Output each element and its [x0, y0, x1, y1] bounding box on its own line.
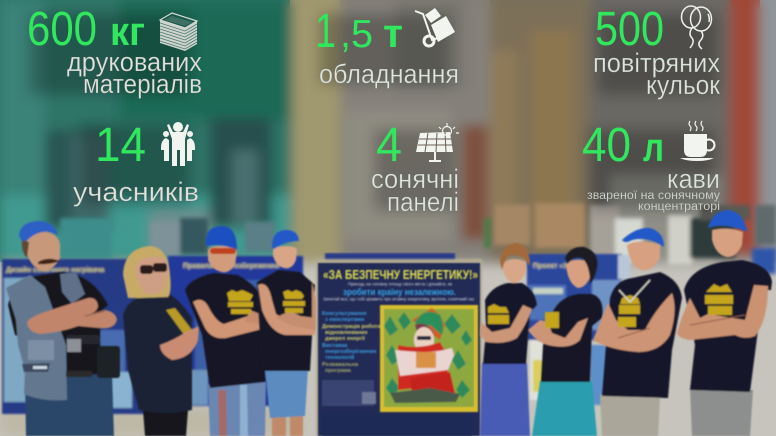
poster list: технологій [325, 354, 354, 361]
poster list: енергозберігаючих [325, 348, 378, 355]
stat: 500 balloons: кульок [646, 70, 720, 100]
poster list: відновлюваних [325, 330, 369, 336]
right blue banner: Проект «Ук [533, 263, 571, 270]
left blue banners: Правила енергозбереження [183, 262, 279, 270]
icon: balloons [682, 6, 712, 49]
stat: 500 balloons: повітряних [593, 48, 720, 78]
background windows and right banner [60, 203, 776, 274]
person 5: woman in blue skirt [480, 243, 537, 436]
person 2: blonde woman with sunglasses [123, 246, 199, 436]
shirt logo [705, 284, 733, 315]
poster list: Виставка [322, 343, 348, 349]
poster list [322, 311, 381, 374]
stat: 40 l coffee [582, 119, 720, 213]
stat: 4 solar panels: 4 [376, 119, 402, 172]
stat: 1.5 t equipment [315, 5, 459, 89]
shirt logo [545, 312, 559, 328]
poster slogan: зробити країну незалежною. [343, 287, 456, 297]
stat: 1.5 t equipment: т [383, 12, 403, 56]
stat: 40 l coffee: кави [667, 164, 720, 194]
poster list: з екоспертами [325, 317, 364, 323]
stat: 1.5 t equipment: обладнання [319, 59, 459, 89]
stat: 4 solar panels [371, 119, 459, 217]
person 7: man with necklace [593, 228, 682, 436]
shirt logo [618, 295, 640, 327]
stat: 40 l coffee: 40 [582, 119, 631, 172]
icon: hand truck with boxes [415, 8, 455, 46]
poster title: «ЗА БЕЗПЕЧНУ ЕНЕРГЕТИКУ!» [323, 267, 478, 282]
poster illustration: Cossack [380, 305, 478, 412]
stat: 600 kg printed materials: матеріалів [83, 69, 202, 99]
stat: 14 participants [73, 119, 199, 207]
stat: 14 participants: 14 [95, 119, 146, 172]
stat: 4 solar panels: панелі [387, 187, 459, 217]
poster subtitle: Приходь на головну площу свого міста і дізнайся, як [348, 280, 452, 286]
stat: 14 participants: учасників [73, 177, 199, 207]
stat: 500 balloons: 500 [595, 3, 664, 56]
stat: 1.5 t equipment: ,5 [340, 13, 373, 56]
stat: 600 kg printed materials: кг [110, 10, 145, 54]
shirt logo [488, 304, 509, 324]
icon: coffee cup [680, 121, 714, 161]
left blue banners: Дизайн сонячного нагрівача [6, 266, 104, 274]
dark glow behind text [30, 14, 718, 210]
poster bottom panels [322, 380, 472, 436]
stat: 40 l coffee: концентраторі [638, 201, 720, 213]
left blue banners [2, 256, 303, 414]
icon: solar panel with sun [416, 123, 459, 161]
stat: 600 kg printed materials: 600 [27, 3, 97, 56]
stat: 4 solar panels: сонячні [371, 164, 459, 194]
central poster [316, 259, 482, 436]
poster list: Розважальна [322, 362, 359, 368]
shirt logo [283, 290, 305, 313]
person 1: man with moustache and vest [6, 221, 120, 436]
icon: group of people [161, 122, 195, 166]
poster list: програма [325, 368, 352, 374]
icon: paper stack [160, 13, 197, 51]
stat: 600 kg printed materials: друкованих [67, 47, 202, 77]
poster description: Запитай все, що тобі цікавить про атомну енергетику, вугілля, сонячний газ. [323, 296, 475, 302]
shirt logo [227, 290, 253, 314]
stat: 1.5 t equipment: 1 [315, 5, 336, 58]
poster list: Консультування [322, 311, 367, 317]
stat: 40 l coffee: звареної на сонячному [587, 190, 720, 202]
person 6: woman in teal skirt [528, 247, 603, 436]
person 3: man with red sunglasses [185, 226, 271, 436]
stat: 600 kg printed materials [27, 3, 202, 99]
person 4: young man in blue cap [257, 230, 316, 436]
poster list: Демонстрація роботи [322, 323, 381, 330]
stat: 500 balloons [593, 3, 720, 100]
poster list: джерел енергії [325, 336, 365, 342]
stat: 40 l coffee: л [643, 126, 664, 170]
poster behind [325, 253, 455, 262]
right blue banner [527, 254, 630, 405]
person 8: tall man in blue cap [677, 210, 772, 436]
